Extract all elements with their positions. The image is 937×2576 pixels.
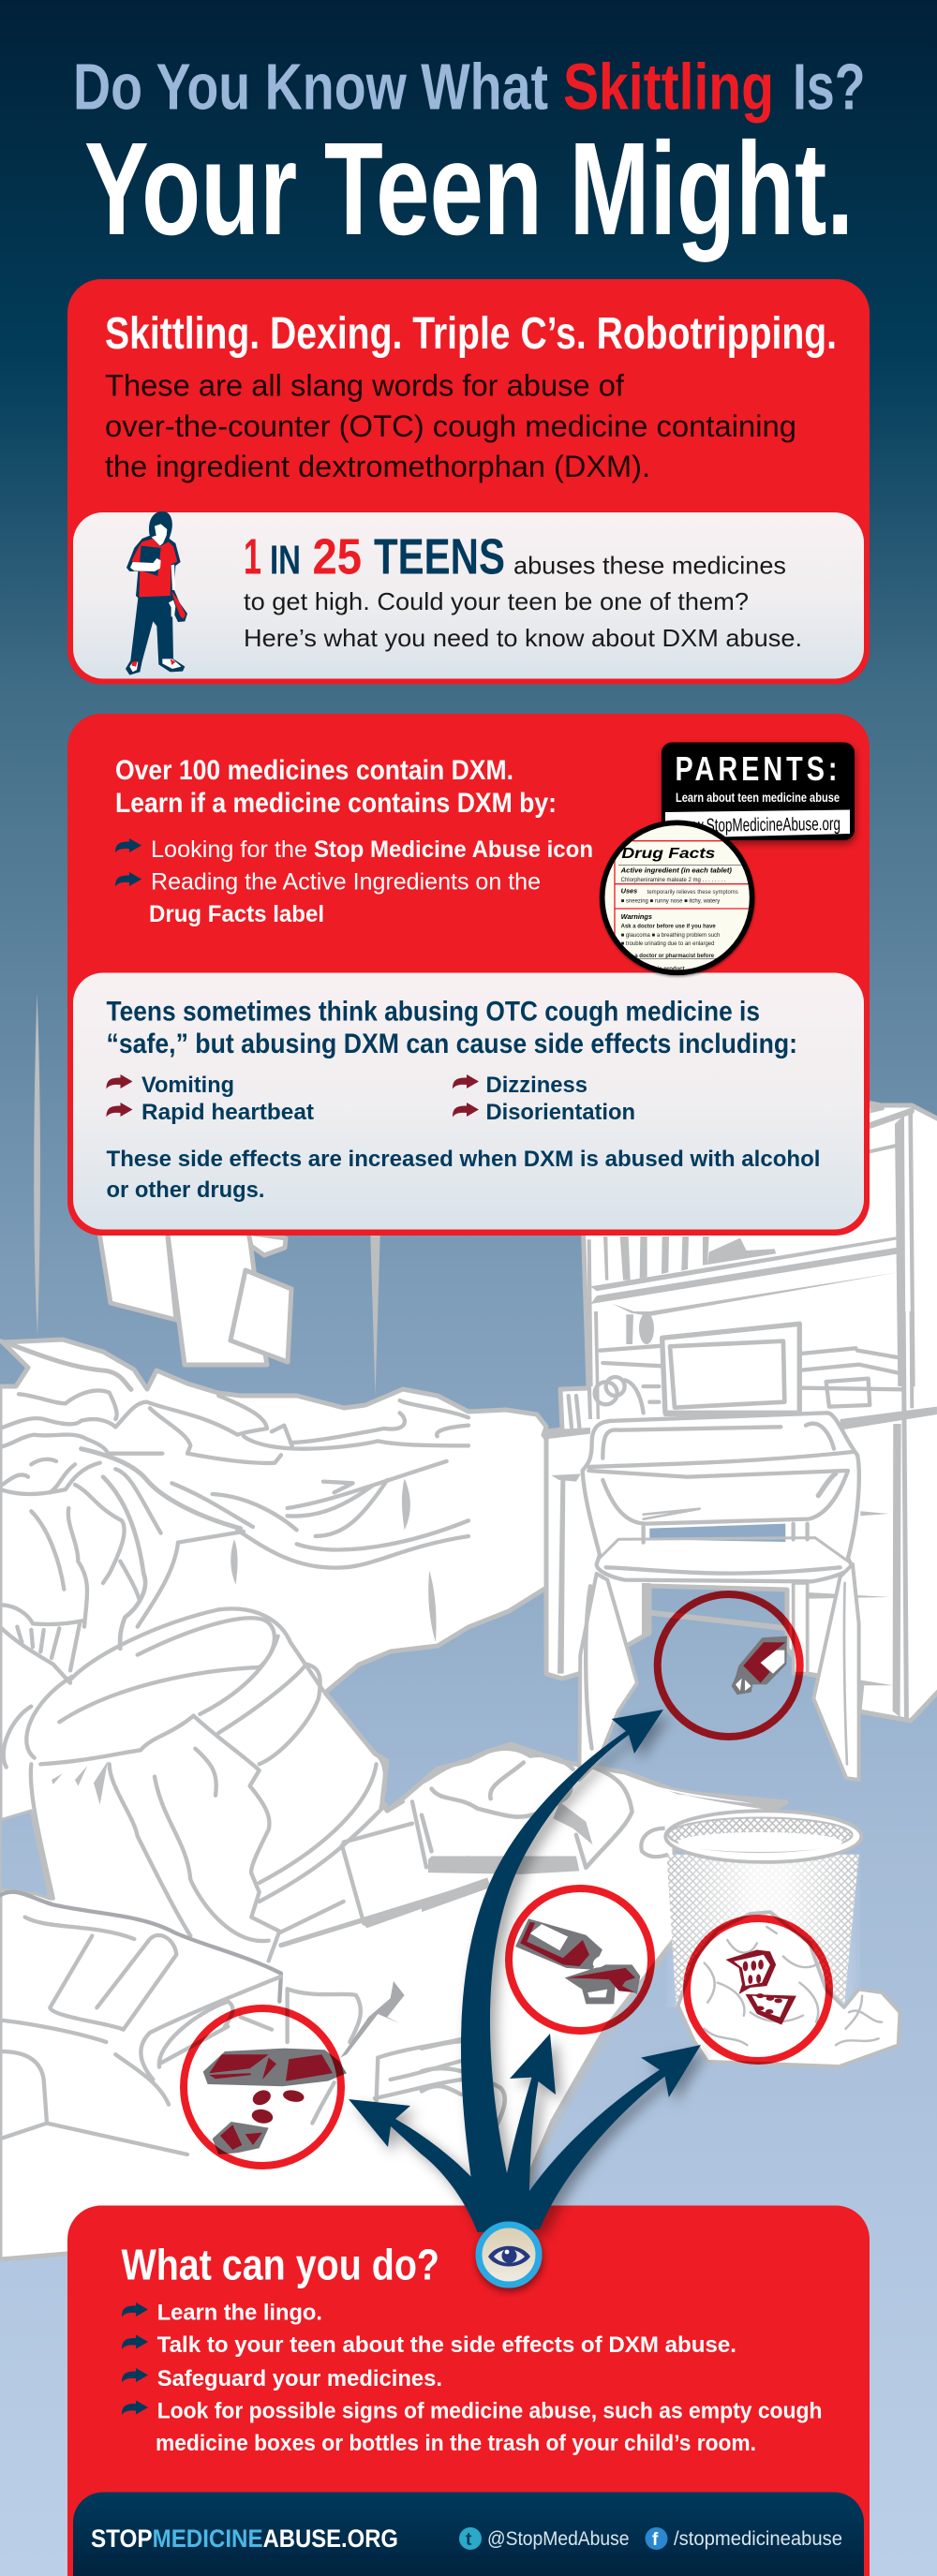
alcohol warning text: These side effects are increased when DXM is abused with alcohol <box>107 1147 821 1172</box>
magnified drug facts label <box>602 822 752 981</box>
footer website <box>91 2524 398 2553</box>
panel: medicines and side effects <box>67 714 870 1236</box>
window below chair back <box>649 1524 785 1542</box>
shelf uprights and desk top <box>543 1311 937 1721</box>
red panel background <box>67 714 870 1236</box>
inner statistic panel <box>73 512 864 678</box>
what can you do heading: What can you do? <box>122 2241 439 2289</box>
statistic: 1 in 25 teens: TEENS <box>374 528 505 585</box>
statistic body text: abuses these medicines <box>513 551 786 579</box>
dxm heading: Learn if a medicine contains DXM by: <box>115 788 557 819</box>
callout: cough syrup bottle circle <box>509 1888 651 2031</box>
items on desk <box>562 1346 902 1427</box>
red ring <box>184 2008 341 2166</box>
side effects heading: “safe,” but abusing DXM can cause side effects including: <box>107 1029 797 1059</box>
twitter handle: @StopMedAbuse <box>487 2528 630 2550</box>
paper crumple creases <box>705 1927 882 2045</box>
side effects heading: Teens sometimes think abusing OTC cough medicine is <box>107 997 760 1027</box>
statistic: 1 in 25 teens: 25 <box>313 528 362 585</box>
side effects list: Dizziness <box>485 1073 587 1098</box>
statistic body text: to get high. Could your teen be one of them? <box>244 587 749 615</box>
inner side effects panel <box>73 972 864 1229</box>
magnified drug facts label: Active ingredient (in each tablet) <box>620 866 732 875</box>
bed linens and clothes line art <box>0 1341 468 1768</box>
shelf details <box>587 1101 915 1386</box>
left chair leg <box>579 1574 637 1780</box>
bed shading strokes <box>0 1341 468 1768</box>
side effects list: Rapid heartbeat <box>141 1100 314 1125</box>
arrows from the eye to each clue <box>349 1710 701 2232</box>
how to identify list: Looking for the <box>151 836 307 863</box>
magnified drug facts label: temporarily relieves these symptoms <box>647 890 738 896</box>
posters on the wall <box>98 1227 291 1365</box>
basket body mesh <box>666 1855 859 2007</box>
magnified drug facts label: this product <box>652 967 685 972</box>
magnified drug facts label: Chlorpheniramine maleate 2 mg . . . . . . . . <box>621 878 726 883</box>
parents badge: www.StopMedicineAbuse.org <box>676 814 840 836</box>
callout: blister pack and pills circle <box>184 2008 347 2166</box>
title line one: Is? <box>793 51 866 124</box>
wire waste basket <box>641 1811 861 2007</box>
box flap and shelf bands <box>422 1772 786 1912</box>
magnified drug facts label: ■ sneezing ■ runny nose ■ itchy, watery <box>621 898 720 904</box>
parents badge <box>662 742 855 840</box>
footer website: STOP <box>91 2524 153 2553</box>
desk, monitor, books and chair <box>543 1311 937 1780</box>
title line one: Do You Know What <box>73 51 548 124</box>
dxm heading: Over 100 medicines contain DXM. <box>115 755 513 786</box>
right chair leg <box>813 1564 859 1780</box>
side effects heading <box>107 997 797 1059</box>
alcohol warning text: or other drugs. <box>107 1177 264 1203</box>
callout: blister packs in trash circle <box>687 1918 829 2061</box>
spilled bottle <box>515 1918 640 2004</box>
callout: bottle under chair circle <box>658 1594 800 1737</box>
panel: what can you do <box>67 2205 870 2576</box>
footer website: ABUSE.ORG <box>263 2524 398 2553</box>
statistic: 1 in 25 teens <box>244 528 505 585</box>
slang description <box>105 369 796 483</box>
magnified drug facts label: Ask a doctor before use if you have <box>621 924 716 929</box>
action list: Talk to your teen about the side effects of DXM abuse. <box>157 2332 736 2358</box>
footer website: MEDICINE <box>153 2524 263 2553</box>
footer bar <box>73 2492 864 2576</box>
title line one: Skittling <box>563 51 774 124</box>
wall spikes <box>34 993 380 1396</box>
magnified drug facts label: ■ trouble urinating due to an enlarged <box>621 941 714 947</box>
blue gap between basket and glove <box>0 1811 50 1899</box>
basket handle <box>641 1828 668 1857</box>
magnified drug facts label: Warnings <box>621 912 652 921</box>
panel: what is skittling <box>67 279 870 684</box>
action list: Safeguard your medicines. <box>157 2366 442 2391</box>
slang description: the ingredient dextromethorphan (DXM). <box>105 450 650 483</box>
how to identify list <box>115 836 593 927</box>
chair back and seat <box>583 1413 859 1581</box>
monitor <box>662 1324 799 1413</box>
red panel background <box>67 2205 870 2576</box>
twitter handle: t <box>466 2530 472 2550</box>
action list: Look for possible signs of medicine abuse, such as empty cough <box>157 2398 822 2424</box>
statistic body text <box>244 551 802 652</box>
statistic: 1 in 25 teens: IN <box>270 538 301 583</box>
dxm heading <box>115 755 557 819</box>
illustration: teen bedroom <box>0 993 937 2259</box>
parents badge: Learn about teen medicine abuse <box>676 790 840 805</box>
statistic body text: Here’s what you need to know about DXM abuse. <box>244 624 802 652</box>
basket rim <box>665 1811 861 1862</box>
dark grey cast shadow <box>340 1981 405 2058</box>
bed fold marks <box>231 1478 437 1642</box>
red ring <box>658 1594 800 1737</box>
magnified drug facts label: Uses <box>621 886 637 895</box>
parents badge: PARENTS: <box>675 749 840 788</box>
icon: teen with skateboard <box>126 511 187 675</box>
title <box>73 51 866 262</box>
slang description: These are all slang words for abuse of <box>105 369 624 403</box>
under-desk rail <box>650 1613 787 1628</box>
how to identify list: Reading the Active Ingredients on the <box>151 869 541 896</box>
box, crumple and blanket line art <box>422 1749 900 2173</box>
facebook handle: f <box>652 2530 659 2550</box>
crumpled paper pile <box>678 1912 900 2066</box>
laundry, glove and box line art <box>0 1716 468 2154</box>
action list: Learn the lingo. <box>157 2301 322 2325</box>
slang description: over-the-counter (OTC) cough medicine containing <box>105 409 796 443</box>
desk support legs <box>794 1583 808 1674</box>
fabric and hand strokes <box>0 1716 468 2154</box>
magnified drug facts label: a doctor or pharmacist before <box>634 954 715 959</box>
magnified drug facts label: Drug Facts <box>621 846 715 862</box>
red ring <box>509 1888 651 2031</box>
action list: medicine boxes or bottles in the trash of your child’s room. <box>156 2431 756 2456</box>
empty blister packs <box>725 1950 796 2025</box>
side effects list <box>107 1073 635 1125</box>
small bottle on the floor <box>732 1636 787 1695</box>
bed and floor clutter silhouette <box>0 1340 786 2259</box>
action list <box>122 2301 823 2456</box>
magnified drug facts label: ■ glaucoma ■ a breathing problem such <box>621 933 720 939</box>
side effects list: Vomiting <box>141 1073 234 1098</box>
red ring <box>687 1918 829 2061</box>
shelf and desk <box>546 1105 937 1721</box>
pill box and pills <box>203 2049 347 2154</box>
how to identify list: Drug Facts label <box>149 901 324 927</box>
icon: eye <box>479 2225 539 2285</box>
how to identify list: Stop Medicine Abuse icon <box>314 836 593 863</box>
red panel background <box>67 279 870 684</box>
facebook handle: /stopmedicineabuse <box>674 2528 842 2550</box>
alcohol warning text <box>107 1147 821 1203</box>
side effects list: Disorientation <box>485 1100 635 1125</box>
statistic: 1 in 25 teens: 1 <box>244 528 261 585</box>
